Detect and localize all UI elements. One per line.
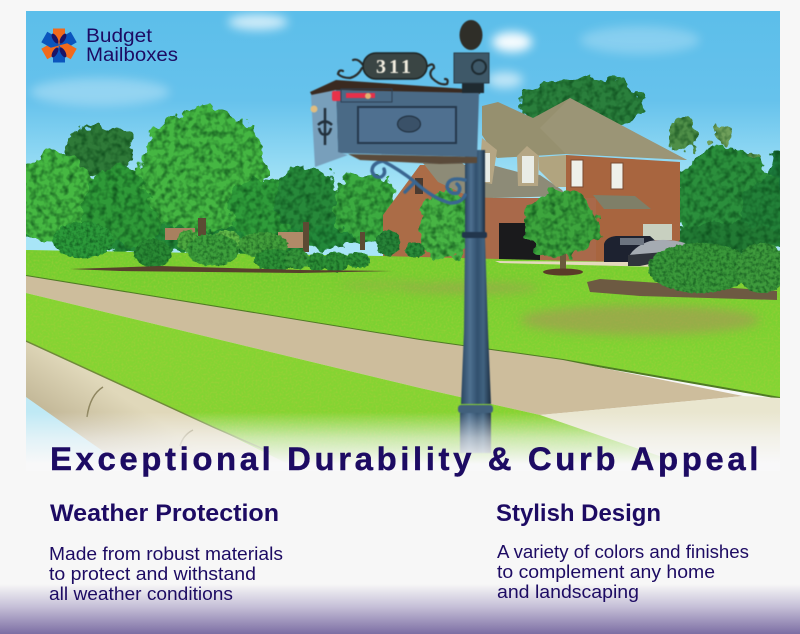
post <box>458 150 493 453</box>
white fade <box>26 414 780 471</box>
far lawn <box>26 250 780 398</box>
house number: 311 <box>376 56 414 78</box>
left trees <box>10 108 410 254</box>
post bottom fade <box>460 413 491 453</box>
section: weather protection <box>49 500 283 604</box>
shrubs <box>53 222 425 272</box>
door panel <box>358 107 456 143</box>
box underside <box>348 154 477 164</box>
dry lawn patches <box>340 281 760 335</box>
body: weather protection: Made from robust materials <box>49 544 283 564</box>
red flag <box>332 89 392 102</box>
street <box>26 397 104 454</box>
heading: weather protection: Weather Protection <box>50 500 279 527</box>
body: weather protection: all weather conditions <box>49 584 233 604</box>
box side <box>311 90 348 167</box>
logo mark <box>41 28 77 62</box>
side ornament <box>318 108 332 145</box>
porch roof <box>593 195 651 209</box>
box front <box>336 90 479 157</box>
tree trunks <box>198 218 365 252</box>
body: stylish design: to complement any home <box>497 562 715 582</box>
logo wordmark: Mailboxes <box>86 45 178 66</box>
post cap cube <box>454 53 489 83</box>
heading: stylish design: Stylish Design <box>496 500 661 527</box>
cap ball <box>460 20 482 50</box>
near lawn <box>26 293 700 470</box>
main brick wall <box>566 155 680 262</box>
photo: suburban house and lawn <box>10 11 796 480</box>
garage door <box>499 223 540 261</box>
curb <box>26 340 270 458</box>
lawn dark edge <box>26 276 780 398</box>
address scrollwork <box>338 60 448 84</box>
logo wordmark <box>86 26 178 66</box>
hedge right <box>648 243 788 293</box>
front yard trees <box>417 191 600 272</box>
house <box>383 98 687 262</box>
post neck <box>462 83 484 93</box>
logo wordmark: Budget <box>86 26 153 47</box>
body: stylish design <box>497 542 749 602</box>
address plate <box>363 53 427 79</box>
body: stylish design: A variety of colors and finishes <box>497 542 749 562</box>
windows <box>571 160 583 187</box>
bottom purple gradient band <box>0 584 800 634</box>
lower roof <box>423 163 566 198</box>
body: weather protection: to protect and withstand <box>49 564 256 584</box>
sky <box>26 11 780 261</box>
bracket scroll <box>372 161 465 203</box>
box top <box>310 80 480 96</box>
upper wall beside dormer <box>539 155 566 187</box>
concrete driveway apron <box>540 396 780 451</box>
mailbox post and box <box>310 20 493 453</box>
body: weather protection <box>49 544 283 604</box>
dormer <box>517 146 539 186</box>
section: stylish design <box>496 500 749 602</box>
trees behind house <box>520 77 796 254</box>
logo <box>41 26 178 66</box>
distant houses <box>165 228 308 248</box>
garage wall <box>490 198 596 262</box>
sidewalk <box>26 276 743 415</box>
left wing brick <box>383 165 500 262</box>
mulch beds <box>70 266 777 300</box>
title: Exceptional Durability & Curb Appeal <box>50 441 762 477</box>
body: stylish design: and landscaping <box>497 582 639 602</box>
cap ornament <box>472 60 486 74</box>
clouds <box>30 14 700 106</box>
driveway <box>495 261 660 267</box>
rear roof <box>482 98 687 160</box>
door emblem <box>398 116 420 132</box>
cars <box>604 236 690 266</box>
